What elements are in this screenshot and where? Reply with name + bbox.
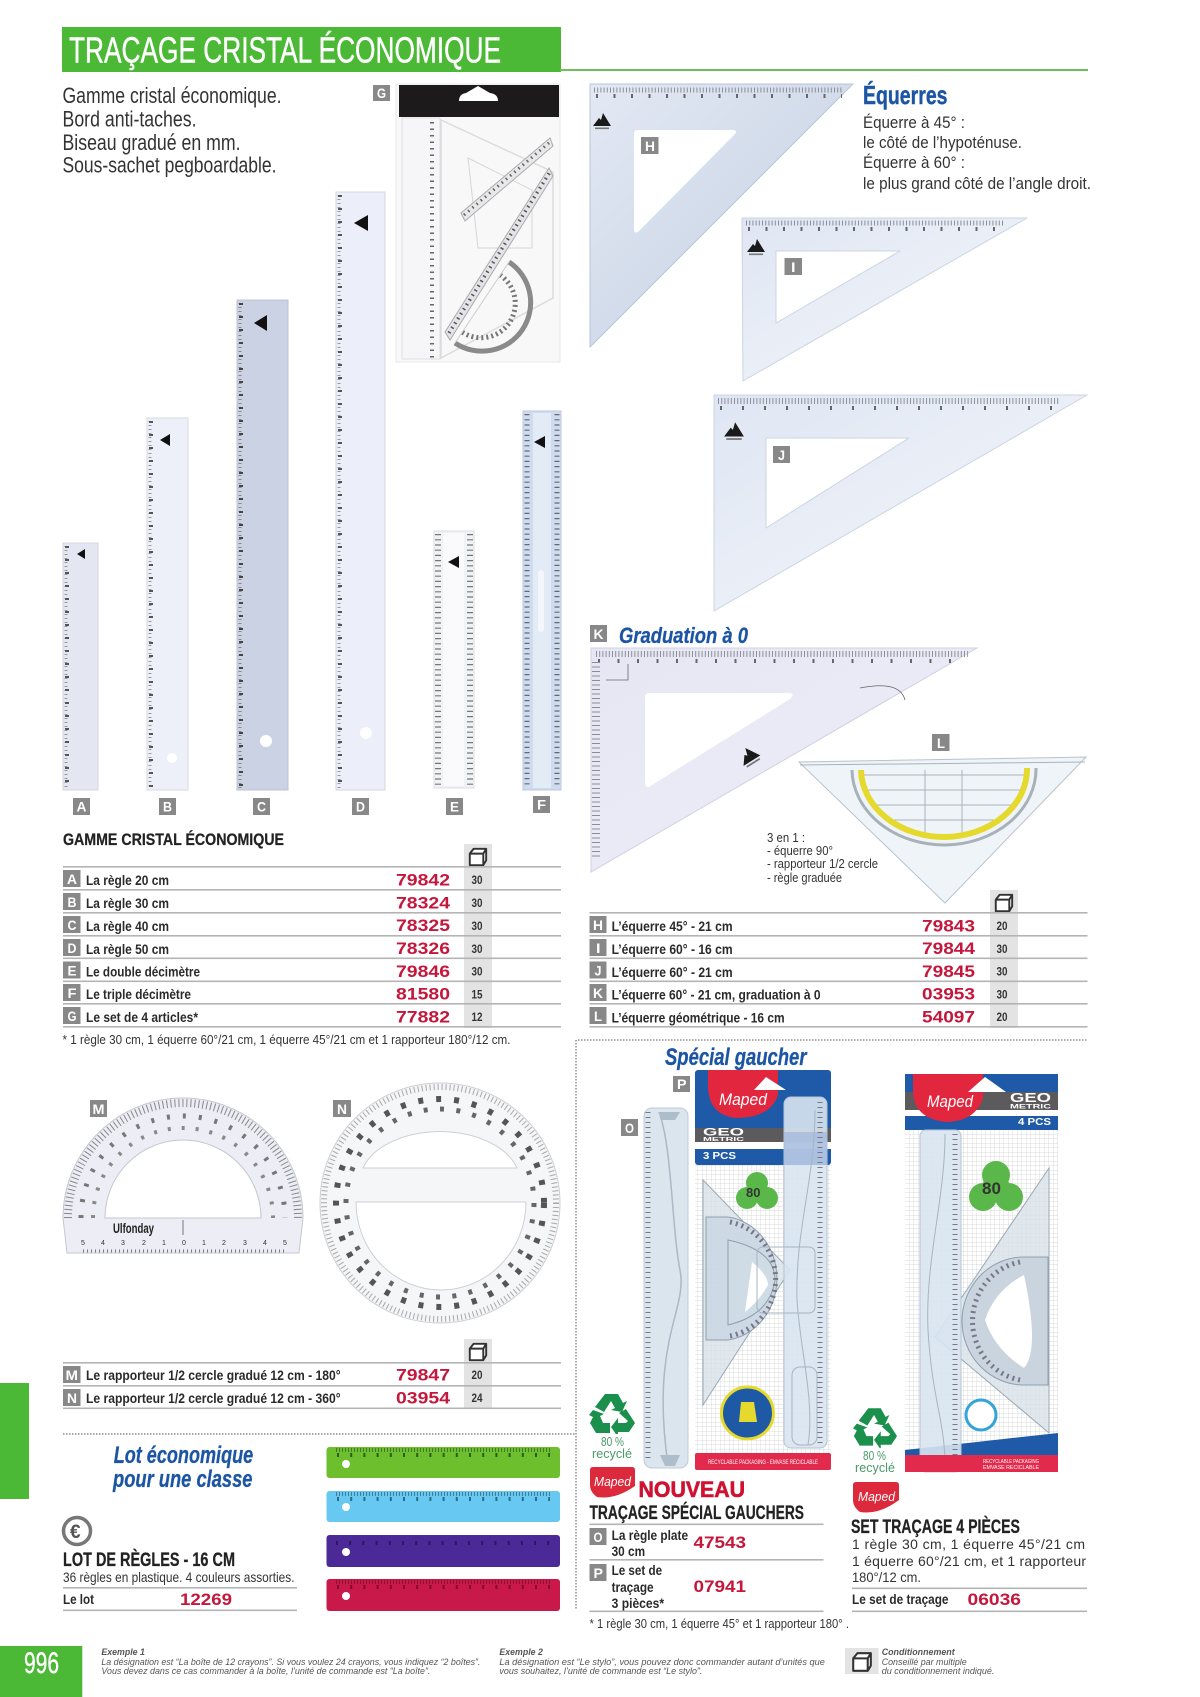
set square I <box>742 218 1027 381</box>
ruler D <box>336 192 385 790</box>
text: lot de règles: 36 règles en plastique. 4 couleurs assorties. <box>63 1569 294 1585</box>
table: rulers: 78325 <box>396 916 450 935</box>
heading: gamme cristal: GAMME CRISTAL ÉCONOMIQUE <box>63 830 284 849</box>
table: rulers: 15 <box>472 988 483 1002</box>
footer: exemple 2: La désignation est “Le stylo”, vous pouvez donc commander autant d’unités que <box>499 1657 825 1668</box>
labels A to F <box>73 796 550 815</box>
logo: maped left <box>590 1467 635 1498</box>
text: lot de règles <box>63 1549 297 1611</box>
table: protractors <box>63 1339 561 1409</box>
labels A to F: F <box>537 796 546 812</box>
ruler B <box>147 418 188 790</box>
table: set squares: J <box>594 962 602 978</box>
table: protractors: 24 <box>472 1391 483 1405</box>
set square K <box>591 648 977 872</box>
product: set 4 pieces pack: GEO <box>1010 1090 1051 1105</box>
icon: recycling right <box>853 1408 897 1475</box>
icon: recycling right: 80 % <box>863 1448 886 1463</box>
table: set squares: 30 <box>996 964 1008 978</box>
product P: pack 3 pieces: Maped <box>719 1090 767 1109</box>
footnote: set of 4: * 1 règle 30 cm, 1 équerre 60°/21 cm, 1 équerre 45°/21 cm et 1 rapporteur 180°/12 cm. <box>62 1032 510 1047</box>
text: équerres note: le côté de l’hypoténuse. <box>863 133 1022 152</box>
panel: traçage spécial gauchers: 07941 <box>694 1577 746 1596</box>
table: set squares: L <box>594 1008 602 1024</box>
protractor N <box>320 1083 560 1323</box>
text: 3 en 1 note: - rapporteur 1/2 cercle <box>767 857 878 871</box>
table: set squares: I <box>596 940 600 956</box>
label L <box>932 734 950 751</box>
protractor M: 5 <box>81 1240 85 1247</box>
table: rulers: 78324 <box>396 894 451 912</box>
protractor M: 4 <box>101 1240 105 1247</box>
protractor M: 5 <box>283 1240 287 1247</box>
labels A to F: D <box>356 798 365 814</box>
table: protractors: 79847 <box>396 1366 450 1384</box>
heading: équerres: Équerres <box>863 80 948 110</box>
panel: traçage spécial gauchers: 47543 <box>694 1533 746 1552</box>
text: 3 en 1 note: 3 en 1 : <box>767 831 805 845</box>
table: set squares <box>590 890 1088 1028</box>
labels A to F: E <box>450 798 459 814</box>
table: rulers: 78326 <box>396 939 450 958</box>
table: rulers: F <box>68 985 77 1001</box>
label K <box>590 625 607 642</box>
table: set squares: 79843 <box>922 916 975 936</box>
footer: exemple 1: Exemple 1 <box>101 1647 145 1658</box>
table: rulers: A <box>67 871 77 887</box>
table: rulers: D <box>68 940 76 956</box>
labels A to F: B <box>163 798 172 814</box>
table: rulers: G <box>68 1008 77 1024</box>
table: rulers: B <box>68 894 76 910</box>
table: rulers: La règle 20 cm <box>86 872 169 888</box>
product P: pack 3 pieces: METRIC <box>703 1137 744 1143</box>
product P: pack 3 pieces <box>695 1070 831 1470</box>
footer: exemple 2: Exemple 2 <box>499 1647 544 1658</box>
logo: maped right <box>853 1482 899 1512</box>
table: rulers: 30 <box>472 964 483 978</box>
logo: maped right: Maped <box>858 1489 896 1504</box>
side tab <box>0 1383 29 1499</box>
product: set 4 pieces pack: METRIC <box>1010 1104 1052 1110</box>
label J <box>773 446 790 463</box>
product P: pack 3 pieces: GEO <box>703 1126 745 1138</box>
protractor M: 0 <box>182 1240 186 1247</box>
table: set squares: L’équerre 60° - 21 cm, graduation à 0 <box>612 986 821 1002</box>
panel: traçage spécial gauchers: P <box>594 1565 603 1581</box>
intro text: Biseau gradué en mm. <box>62 130 240 155</box>
ruler E <box>434 531 474 788</box>
heading: lot économique: pour une classe <box>112 1466 252 1493</box>
labels A to F: C <box>257 798 266 814</box>
text: lot de règles: LOT DE RÈGLES - 16 CM <box>63 1549 235 1571</box>
label O <box>621 1119 638 1136</box>
table: set squares: 20 <box>996 919 1008 933</box>
table: rulers: Le set de 4 articles* <box>86 1009 198 1025</box>
panel: set traçage 4 pièces: 06036 <box>968 1590 1021 1609</box>
table: rulers: 79846 <box>396 962 450 981</box>
intro text: Bord anti-taches. <box>62 106 196 132</box>
label K: K <box>594 626 604 642</box>
footer: exemple 2: vous souhaitez, l’unité de commande est “Le stylo”. <box>499 1666 702 1677</box>
table: rulers: Le double décimètre <box>86 964 200 980</box>
intro text <box>62 83 282 178</box>
footer: conditionnement <box>845 1647 994 1677</box>
label N <box>333 1100 351 1117</box>
title bar <box>62 27 1088 72</box>
product G: set pack <box>396 84 560 362</box>
text: 3 en 1 note: - règle graduée <box>767 871 842 885</box>
icon: recycling left: 80 % <box>601 1434 624 1449</box>
icon: recycling right: recyclé <box>855 1460 895 1475</box>
panel: traçage spécial gauchers: traçage <box>612 1579 654 1595</box>
table: set squares: 54097 <box>922 1008 975 1026</box>
page number tab: 996 <box>24 1647 59 1680</box>
protractor M: 2 <box>222 1240 226 1247</box>
footer: conditionnement: du conditionnement indiqué. <box>882 1666 994 1677</box>
label N: N <box>337 1101 347 1117</box>
product: set 4 pieces pack: Maped <box>927 1092 973 1111</box>
product: set 4 pieces pack: EMVASE RECICLABLE <box>983 1465 1039 1471</box>
table: set squares: K <box>593 985 603 1001</box>
set square H <box>590 84 853 347</box>
table: rulers: 77882 <box>396 1008 450 1026</box>
product P: pack 3 pieces: 80 <box>746 1185 760 1200</box>
table: set squares: 20 <box>996 1010 1008 1024</box>
table: protractors: 20 <box>472 1368 483 1382</box>
footer: conditionnement: Conditionnement <box>882 1647 955 1658</box>
icon: euro <box>64 1518 90 1544</box>
label I: I <box>791 259 796 275</box>
label G: G <box>377 85 386 101</box>
table: set squares: L’équerre 60° - 21 cm <box>612 964 733 980</box>
text: lot de règles: 12269 <box>180 1590 232 1609</box>
table: set squares: H <box>593 917 603 933</box>
text: 3 en 1 note <box>767 831 878 885</box>
label O: O <box>625 1120 634 1136</box>
table: rulers: La règle 30 cm <box>86 895 169 911</box>
table: rulers: 79842 <box>396 871 450 890</box>
table: set squares: 79844 <box>922 939 976 958</box>
text: 3 en 1 note: - équerre 90° <box>767 844 833 858</box>
label M <box>90 1100 107 1117</box>
icon: recycling left: recyclé <box>592 1446 632 1461</box>
set square J <box>714 395 1087 611</box>
ruler F <box>523 411 561 790</box>
footer: exemple 1: La désignation est “La boîte de 12 crayons”. Si vous voulez 24 crayons, vous indiquez “2 boîtes”. <box>101 1657 480 1668</box>
panel: traçage spécial gauchers: O <box>594 1529 603 1545</box>
icon: recycling left <box>589 1394 635 1461</box>
table: set squares: 03953 <box>922 984 975 1004</box>
table: set squares: 79845 <box>922 962 975 981</box>
table: set squares: L’équerre 45° - 21 cm <box>612 918 733 934</box>
rulers: coloured lot <box>326 1447 560 1611</box>
set square L: geometric <box>799 757 1086 903</box>
panel: traçage spécial gauchers: La règle plate <box>612 1527 688 1543</box>
table: rulers: La règle 50 cm <box>86 941 169 957</box>
panel: traçage spécial gauchers <box>590 1502 824 1612</box>
table: rulers: 30 <box>472 873 483 887</box>
table: rulers: 30 <box>472 942 483 956</box>
text: équerres note <box>863 113 1091 193</box>
label H: H <box>645 138 655 154</box>
protractor M: Ulfonday <box>113 1220 154 1236</box>
protractor M: 4 <box>263 1240 267 1247</box>
label I <box>784 258 802 275</box>
table: rulers: C <box>68 917 76 933</box>
icon: euro: € <box>70 1522 81 1543</box>
product: set 4 pieces pack: RECYCLABLE PACKAGING <box>983 1459 1039 1465</box>
intro text: Sous-sachet pegboardable. <box>62 153 276 178</box>
panel: set traçage 4 pièces <box>851 1516 1087 1612</box>
ruler A <box>63 543 98 790</box>
label L: L <box>937 735 945 751</box>
table: set squares: L’équerre géométrique - 16 cm <box>612 1010 785 1026</box>
protractor M: 1 <box>202 1240 206 1247</box>
table: protractors: 03954 <box>396 1388 451 1408</box>
panel: set traçage 4 pièces: 1 équerre 60°/21 cm, et 1 rapporteur <box>852 1553 1086 1569</box>
text: équerres note: Équerre à 60° : <box>863 153 965 172</box>
ruler C <box>237 300 288 790</box>
table: rulers: 30 <box>472 919 483 933</box>
product P: pack 3 pieces: 3 PCS <box>703 1151 736 1162</box>
panel: traçage spécial gauchers: Le set de <box>612 1562 662 1578</box>
product: set 4 pieces pack <box>905 1074 1058 1472</box>
protractor M: 1 <box>162 1240 166 1247</box>
footer: exemple 1 <box>101 1647 480 1677</box>
panel: set traçage 4 pièces: 180°/12 cm. <box>852 1569 921 1585</box>
product: set 4 pieces pack: 4 PCS <box>1018 1117 1051 1128</box>
table: set squares: L’équerre 60° - 16 cm <box>612 941 733 957</box>
text: équerres note: le plus grand côté de l’angle droit. <box>863 174 1091 193</box>
heading: graduation à 0: Graduation à 0 <box>619 623 749 648</box>
panel: set traçage 4 pièces: 1 règle 30 cm, 1 équerre 45°/21 cm <box>852 1536 1085 1552</box>
table: rulers: La règle 40 cm <box>86 918 169 934</box>
table: rulers: E <box>68 962 76 978</box>
protractor M: 3 <box>243 1240 247 1247</box>
labels A to F: A <box>76 798 86 814</box>
table: set squares: 30 <box>996 988 1008 1002</box>
table: set squares: 30 <box>996 942 1008 956</box>
protractor M: 2 <box>142 1240 146 1247</box>
product P: pack 3 pieces: RECYCLABLE PACKAGING - EMVASE RECICLABLE <box>708 1460 818 1466</box>
panel: traçage spécial gauchers: TRAÇAGE SPÉCIAL GAUCHERS <box>590 1502 804 1524</box>
label M: M <box>92 1101 104 1117</box>
table: rulers: Le triple décimètre <box>86 986 191 1002</box>
label H <box>641 137 658 154</box>
table: rulers: 81580 <box>396 984 450 1004</box>
table: rulers <box>63 844 561 1028</box>
table: protractors: N <box>67 1390 77 1406</box>
panel: traçage spécial gauchers: 30 cm <box>612 1543 645 1559</box>
table: protractors: Le rapporteur 1/2 cercle gradué 12 cm - 180° <box>86 1367 341 1383</box>
panel: set traçage 4 pièces: Le set de traçage <box>852 1591 949 1607</box>
text: équerres note: Équerre à 45° : <box>863 113 965 132</box>
label J: J <box>778 447 785 463</box>
label G <box>373 85 390 101</box>
text: lot de règles: Le lot <box>63 1591 94 1607</box>
page number tab <box>0 1646 82 1697</box>
protractor M <box>63 1098 303 1253</box>
table: rulers: 12 <box>472 1010 483 1024</box>
table: protractors: Le rapporteur 1/2 cercle gradué 12 cm - 360° <box>86 1390 341 1406</box>
product: set 4 pieces pack: 80 <box>982 1179 1001 1198</box>
badge: nouveau: NOUVEAU <box>638 1477 745 1502</box>
label P <box>673 1076 690 1092</box>
logo: maped left: Maped <box>594 1474 632 1489</box>
title bar: TRAÇAGE CRISTAL ÉCONOMIQUE <box>69 30 501 70</box>
footer: exemple 1: Vous devez dans ce cas commander à la boîte, l’unité de commande est “La boîte”. <box>101 1666 430 1677</box>
protractor M: 3 <box>121 1240 125 1247</box>
ruler O <box>644 1108 688 1468</box>
heading: lot économique: Lot économique <box>114 1442 253 1469</box>
panel: traçage spécial gauchers: 3 pièces* <box>612 1595 665 1611</box>
label P: P <box>677 1076 686 1092</box>
footnote: gauchers: * 1 règle 30 cm, 1 équerre 45° et 1 rapporteur 180° . <box>590 1616 849 1631</box>
footer: exemple 2 <box>499 1647 825 1677</box>
heading: spécial gaucher: Spécial gaucher <box>665 1044 808 1071</box>
panel: set traçage 4 pièces: SET TRAÇAGE 4 PIÈCES <box>851 1516 1020 1538</box>
heading: lot économique <box>112 1442 253 1493</box>
footer: conditionnement: Conseillé par multiple <box>882 1657 967 1668</box>
table: protractors: M <box>66 1367 78 1383</box>
intro text: Gamme cristal économique. <box>62 83 282 108</box>
table: rulers: 30 <box>472 896 483 910</box>
